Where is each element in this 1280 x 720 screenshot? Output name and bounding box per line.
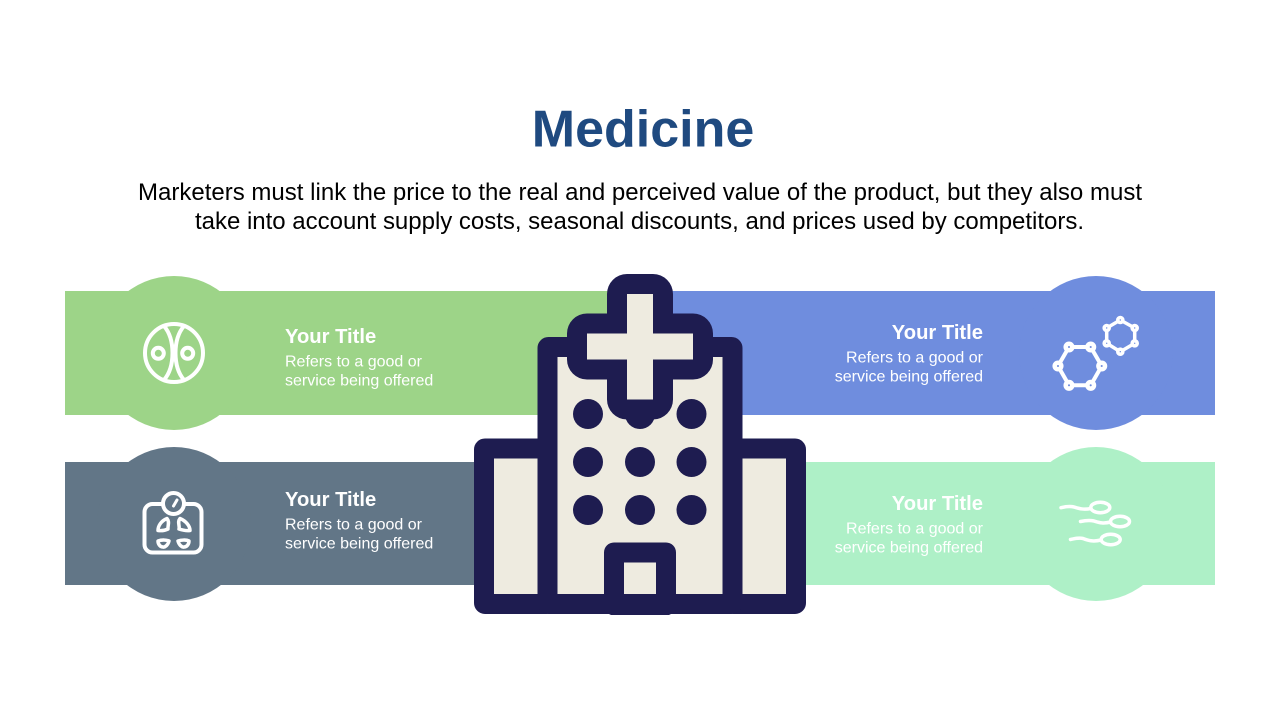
text: mint panel bbox=[835, 493, 984, 556]
panel: blue top right bbox=[655, 276, 1215, 430]
panel: slate bottom left bbox=[65, 447, 495, 601]
text: mint panel: service being offered bbox=[835, 540, 983, 556]
right wing bbox=[732, 448, 796, 604]
text: blue panel: service being offered bbox=[835, 368, 983, 386]
central tower bbox=[548, 347, 732, 604]
icon: cells with tails bbox=[1061, 502, 1130, 545]
text: green panel: service being offered bbox=[285, 372, 433, 390]
left wing bbox=[484, 448, 548, 604]
windows bbox=[573, 399, 706, 525]
text: slate panel: service being offered bbox=[285, 536, 433, 552]
text: mint panel: Your Title bbox=[892, 493, 983, 515]
title: Medicine bbox=[532, 100, 754, 158]
icon: weighing scale bbox=[144, 493, 202, 552]
panel: green top left bbox=[65, 276, 625, 430]
icon: organ circle bbox=[145, 324, 203, 382]
intro text: Marketers must link the price to the real and perceived value of the product, but they also must bbox=[138, 179, 1142, 206]
door bbox=[614, 552, 666, 604]
intro text: take into account supply costs, seasonal discounts, and prices used by competitors. bbox=[195, 208, 1084, 235]
door step bbox=[604, 594, 676, 615]
text: slate panel bbox=[285, 489, 433, 552]
text: mint panel: Refers to a good or bbox=[846, 520, 984, 538]
intro text bbox=[138, 179, 1142, 235]
icon: hospital building bbox=[484, 294, 796, 615]
text: slate panel: Your Title bbox=[285, 489, 376, 511]
text: green panel: Refers to a good or bbox=[285, 354, 423, 370]
text: blue panel: Refers to a good or bbox=[846, 350, 984, 366]
text: blue panel bbox=[835, 322, 984, 386]
icon: molecules bbox=[1055, 318, 1137, 389]
text: slate panel: Refers to a good or bbox=[285, 516, 423, 534]
text: blue panel: Your Title bbox=[892, 322, 983, 344]
text: green panel: Your Title bbox=[285, 326, 376, 348]
medical cross bbox=[587, 294, 693, 400]
panel: mint bottom right bbox=[785, 447, 1215, 601]
text: green panel bbox=[285, 326, 433, 390]
